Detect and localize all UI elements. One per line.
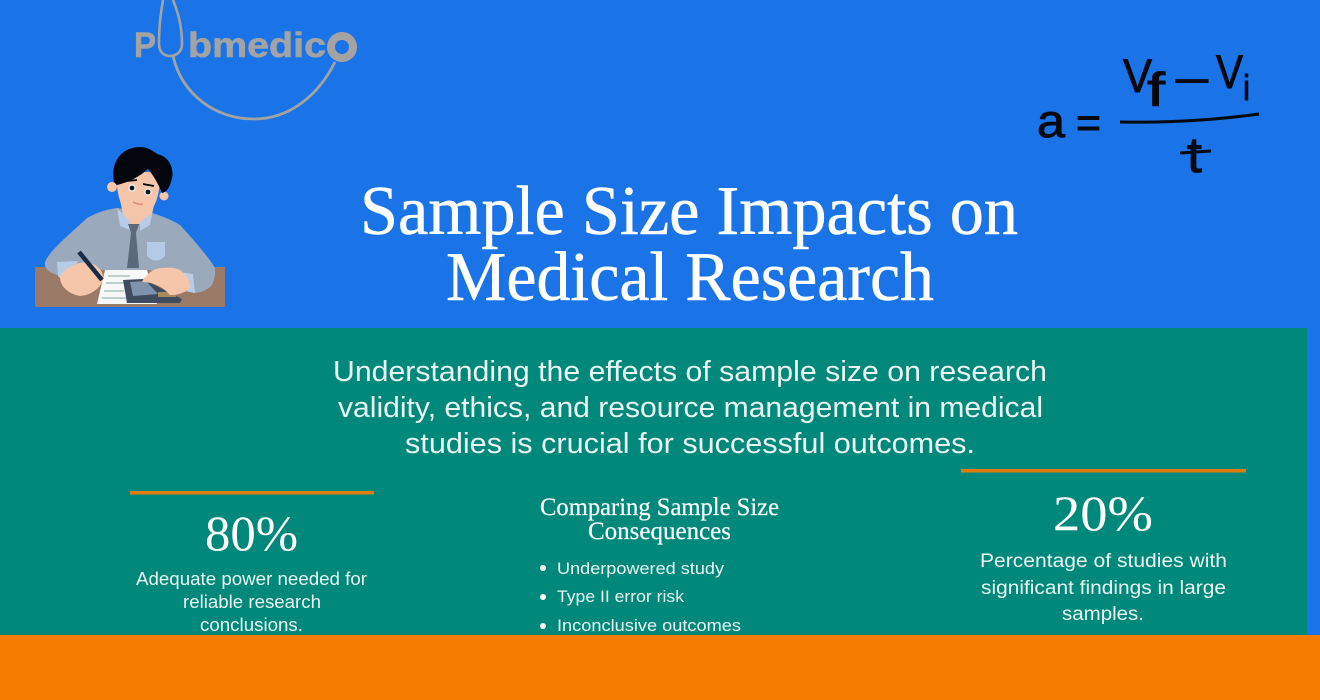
panel: 20% stat: significant findings in large: [981, 578, 1226, 599]
mouth: [133, 202, 143, 204]
intro text: validity, ethics, and resource management in medical: [338, 392, 1043, 424]
face: [117, 172, 160, 217]
eyes: [128, 184, 136, 192]
panel: 20% stat: 20%: [1053, 485, 1153, 541]
panel: 20% stat: Percentage of studies with: [980, 551, 1227, 572]
logo: Pubmedico stethoscope: P: [134, 26, 156, 65]
formula: handwritten acceleration equation: a: [1037, 95, 1065, 147]
panel: teal content band: [0, 328, 1307, 635]
hair: [113, 147, 172, 193]
formula: handwritten acceleration equation: =: [1076, 99, 1101, 146]
panel: 20% stat: samples.: [1062, 604, 1144, 625]
panel: comparing consequences: [540, 494, 779, 635]
icon: man at desk with calculator: [35, 147, 225, 307]
formula: handwritten acceleration equation: i: [1243, 67, 1250, 108]
panel: comparing consequences: Type II error risk: [557, 587, 685, 606]
panel: 80% stat: conclusions.: [200, 615, 303, 635]
calculator: [123, 279, 182, 303]
shirt cuffs: [57, 261, 195, 293]
torso: [45, 208, 215, 293]
neck: [120, 200, 155, 224]
logo: Pubmedico stethoscope: bmedic: [188, 26, 326, 65]
pocket: [147, 242, 165, 260]
title: Sample Size Impacts on: [360, 173, 1018, 250]
formula: handwritten acceleration equation: f: [1147, 63, 1166, 116]
panel: comparing consequences: Comparing Sample Size: [540, 494, 779, 521]
panel: 80% stat: 80%: [205, 505, 298, 561]
logo: Pubmedico stethoscope: [134, 0, 353, 119]
formula: handwritten acceleration equation: V: [1216, 45, 1244, 98]
panel: comparing consequences: Inconclusive outcomes: [557, 616, 741, 635]
intro text: studies is crucial for successful outcomes.: [405, 428, 975, 460]
formula: handwritten acceleration equation: –: [1176, 53, 1209, 102]
panel: comparing consequences: Underpowered study: [557, 559, 725, 578]
intro text: Understanding the effects of sample size on research: [333, 356, 1047, 388]
pen: [79, 252, 102, 280]
formula: handwritten acceleration equation: V: [1123, 49, 1153, 102]
title: Medical Research: [446, 239, 934, 316]
footer: orange band: [0, 635, 1320, 700]
panel: comparing consequences: Consequences: [588, 518, 731, 545]
tie: [127, 224, 139, 268]
panel: 80% stat: [130, 491, 374, 635]
formula: handwritten acceleration equation: t: [1187, 127, 1202, 183]
panel: 80% stat: reliable research: [183, 592, 321, 612]
formula: handwritten acceleration equation: [1037, 45, 1259, 183]
collar: [117, 208, 130, 230]
desk: [35, 267, 225, 307]
panel: 80% stat: Adequate power needed for: [136, 569, 367, 589]
paper: [97, 270, 157, 304]
left hand: [60, 262, 103, 296]
title: [360, 173, 1018, 316]
right hand: [142, 268, 190, 295]
intro text: [333, 356, 1047, 460]
eyebrows: [126, 180, 154, 186]
panel: 20% stat: [961, 469, 1246, 625]
